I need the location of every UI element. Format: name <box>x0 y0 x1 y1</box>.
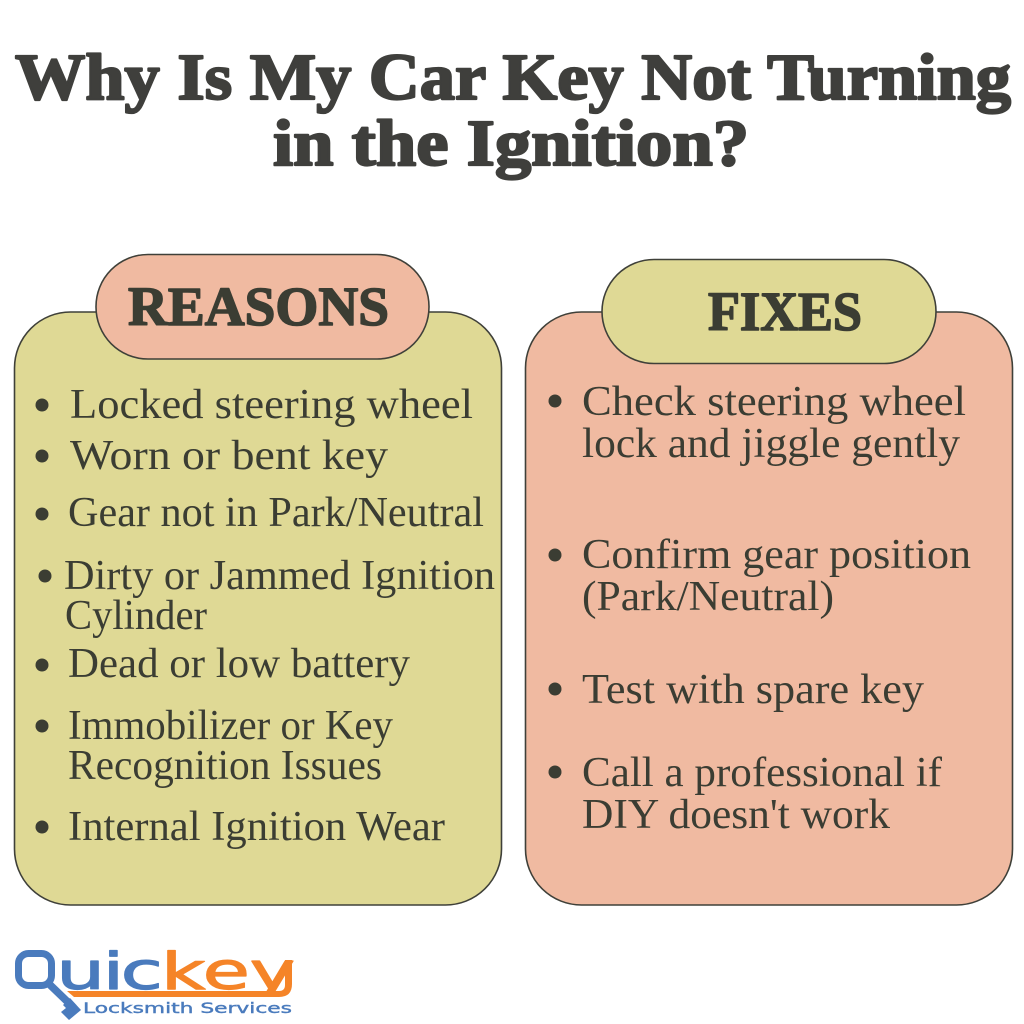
list: reasons: Gear not in Park/Neutral <box>68 490 484 536</box>
list: fixes: Test with spare key <box>582 667 924 713</box>
wordmark: uic <box>56 943 163 1002</box>
icon: key formed from letter Q <box>18 954 81 1020</box>
title: in the Ignition? <box>273 107 749 180</box>
panel background: reasons <box>14 312 502 905</box>
heading: reasons: REASONS <box>128 276 389 337</box>
underline swoosh <box>67 960 292 997</box>
list: reasons: Cylinder <box>65 593 207 639</box>
list: fixes <box>548 379 971 838</box>
panel background: fixes <box>526 312 1012 905</box>
title <box>15 41 1011 180</box>
list: reasons: Dirty or Jammed Ignition <box>64 553 495 599</box>
list: fixes: DIY doesn't work <box>582 792 890 838</box>
list: reasons: Immobilizer or Key <box>68 703 393 749</box>
list: reasons: Internal Ignition Wear <box>68 804 445 850</box>
list: reasons: Locked steering wheel <box>70 382 473 428</box>
title: Why Is My Car Key Not Turning <box>15 41 1011 114</box>
list: reasons <box>36 382 495 850</box>
list: reasons: Dead or low battery <box>68 641 410 687</box>
list: reasons: Recognition Issues <box>68 743 382 789</box>
list: fixes: Check steering wheel <box>582 379 966 425</box>
panel: fixes <box>526 260 1012 905</box>
tagline: Locksmith Services <box>83 1001 292 1017</box>
list: fixes: Confirm gear position <box>582 532 971 578</box>
wordmark <box>62 950 294 991</box>
list: fixes: Call a professional if <box>582 750 942 796</box>
heading: fixes: FIXES <box>708 281 862 342</box>
panel: reasons <box>14 254 502 905</box>
list: fixes: lock and jiggle gently <box>582 421 960 467</box>
wordmark: key <box>161 943 295 1002</box>
list: reasons: Worn or bent key <box>70 433 388 479</box>
logo: Quickey Locksmith Services <box>18 943 295 1020</box>
list: fixes: (Park/Neutral) <box>582 574 834 620</box>
heading: fixes <box>602 260 936 364</box>
heading: reasons <box>96 254 429 359</box>
